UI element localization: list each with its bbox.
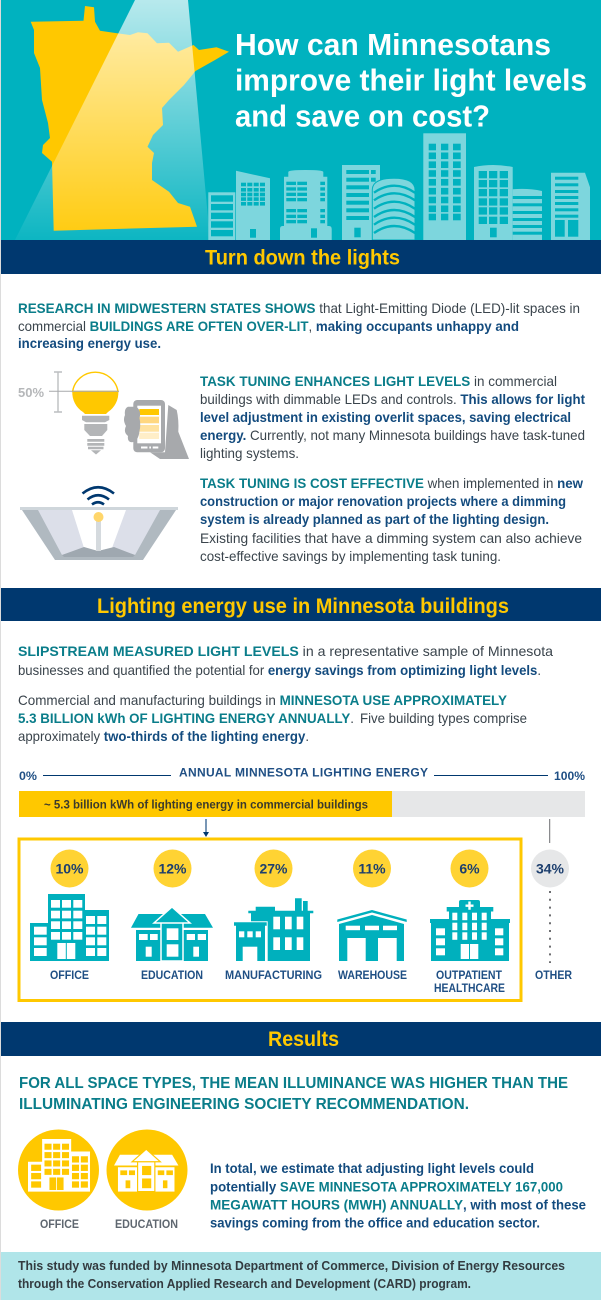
text block: savings estimate: savings coming from the office and education sector. (210, 1216, 540, 1230)
heading: Turn down the lights (0, 240, 601, 274)
text block: task tuning enhances light levels: energy. Currently, not many Minnesota buildings have task-tuned (200, 427, 585, 443)
text block: savings estimate: MEGAWATT HOURS (MWH) ANNUALLY (210, 1198, 463, 1212)
footer: funding note (0, 1252, 601, 1300)
building type: education (131, 850, 213, 982)
text block: task tuning is cost effective: Existing facilities that have a dimming system can also achieve (200, 530, 582, 546)
building type: other: 34% (536, 860, 565, 876)
text block: savings estimate: potentially SAVE MINNESOTA APPROXIMATELY 167,000 (210, 1180, 563, 1194)
text block: 5.3 billion kWh: approximately two-thirds of the lighting energy. (18, 728, 309, 744)
text block: savings estimate (210, 1161, 586, 1230)
heading: Turn down the lights: Turn down the lights (205, 246, 400, 270)
text block: task tuning is cost effective (200, 475, 583, 564)
text block: research intro (18, 300, 580, 351)
building type: manufacturing (225, 850, 322, 982)
map of Minnesota (31, 6, 229, 231)
text block: task tuning enhances light levels: buildings with dimmable LEDs and controls. This allows for light (200, 391, 585, 407)
building type: warehouse (337, 850, 407, 982)
text block: research intro: RESEARCH IN MIDWESTERN STATES SHOWS that Light-Emitting Diode (LED)-lit spaces in (18, 300, 580, 316)
building type: education: 12% (158, 860, 187, 876)
axis: annual Minnesota lighting energy: 100% (554, 769, 585, 783)
building type: outpatient healthcare (430, 850, 510, 995)
heading: Results: Results (268, 1028, 339, 1051)
icon: dimmed bulb and phone (18, 372, 189, 459)
text block: task tuning enhances light levels: lighting systems. (200, 445, 299, 461)
heading: Lighting energy use: Lighting energy use in Minnesota buildings (97, 595, 509, 618)
text block: results statement: FOR ALL SPACE TYPES, THE MEAN ILLUMINANCE WAS HIGHER THAN THE (19, 1075, 568, 1092)
building type: office: OFFICE (50, 970, 89, 982)
title (235, 27, 587, 134)
building type: manufacturing: 27% (259, 860, 288, 876)
title: How can Minnesotans (235, 27, 551, 62)
building type: outpatient healthcare: HEALTHCARE (434, 983, 505, 995)
bar: share of lighting energy: ~ 5.3 billion kWh of lighting energy in commercial buildings (44, 798, 368, 812)
text block: research intro: commercial BUILDINGS ARE OFTEN OVER-LIT, making occupants unhappy and (18, 318, 519, 334)
icon: phone in hand (124, 400, 189, 459)
icon: education circle: EDUCATION (115, 1219, 178, 1231)
icon: education circle (106, 1130, 188, 1231)
building type: warehouse: WAREHOUSE (338, 970, 407, 982)
text block: task tuning is cost effective: system is already planned as part of the lighting design. (200, 511, 549, 527)
building type: outpatient healthcare: 6% (459, 860, 480, 876)
axis: annual Minnesota lighting energy (19, 766, 585, 783)
text block: Slipstream measurement (18, 643, 553, 678)
heading: Results (0, 1022, 601, 1056)
axis: annual Minnesota lighting energy: 0% (19, 769, 37, 783)
icon: office circle (18, 1130, 99, 1231)
icon: dimmed bulb and phone: 50% (18, 385, 44, 400)
icon: office circle: OFFICE (40, 1219, 79, 1231)
axis: annual Minnesota lighting energy: ANNUAL MINNESOTA LIGHTING ENERGY (179, 766, 428, 780)
building type: office (30, 850, 109, 982)
text block: task tuning is cost effective: TASK TUNING IS COST EFFECTIVE when implemented in new (200, 475, 583, 491)
text block: Slipstream measurement: businesses and quantified the potential for energy savings from optimizing light levels. (18, 662, 541, 678)
text block: savings estimate: , with most of these (463, 1198, 586, 1212)
text block: task tuning is cost effective: cost-effective savings by implementing task tuning. (200, 548, 501, 564)
header panel (0, 0, 601, 240)
title: improve their light levels (235, 62, 587, 98)
text block: results statement: ILLUMINATING ENGINEERING SOCIETY RECOMMENDATION. (19, 1096, 469, 1113)
footer: funding note: through the Conservation Applied Research and Development (CARD) program. (18, 1277, 471, 1291)
text block: 5.3 billion kWh (18, 692, 527, 744)
bar: share of lighting energy (19, 791, 585, 817)
building type: other (531, 819, 573, 982)
text block: results statement (19, 1075, 568, 1113)
text block: savings estimate: In total, we estimate that adjusting light levels could (210, 1161, 534, 1176)
icon: connected light fixture (20, 487, 178, 560)
text block: 5.3 billion kWh: Five building types comprise (360, 710, 527, 726)
heading: Lighting energy use (0, 588, 601, 621)
text block: research intro: increasing energy use. (18, 335, 161, 351)
building type: education: EDUCATION (141, 970, 203, 982)
text block: task tuning is cost effective: construction or major renovation projects where a dimming (200, 493, 566, 509)
panel: five building types (19, 839, 521, 1000)
skyline (208, 133, 590, 240)
building type: other: OTHER (535, 970, 573, 982)
building type: outpatient healthcare: OUTPATIENT (436, 970, 502, 982)
text block: Slipstream measurement: SLIPSTREAM MEASURED LIGHT LEVELS in a representative sample of Minnesota (18, 643, 553, 659)
text block: task tuning enhances light levels: TASK TUNING ENHANCES LIGHT LEVELS in commercial (200, 373, 557, 389)
arrow: to building types (203, 819, 209, 837)
text block: 5.3 billion kWh: 5.3 BILLION kWh OF LIGHTING ENERGY ANNUALLY. (18, 710, 354, 726)
footer: funding note: This study was funded by Minnesota Department of Commerce, Division of Energy Resources (18, 1259, 565, 1273)
building type: manufacturing: MANUFACTURING (225, 970, 322, 982)
building type: office: 10% (55, 860, 84, 876)
text block: task tuning enhances light levels: level adjustment in existing overlit spaces, saving electrical (200, 409, 571, 425)
text block: 5.3 billion kWh: Commercial and manufacturing buildings in MINNESOTA USE APPROXIMATELY (18, 692, 508, 708)
title: and save on cost? (235, 98, 490, 134)
light beam (15, 0, 210, 240)
building type: warehouse: 11% (358, 860, 386, 876)
text block: task tuning enhances light levels (200, 373, 585, 461)
